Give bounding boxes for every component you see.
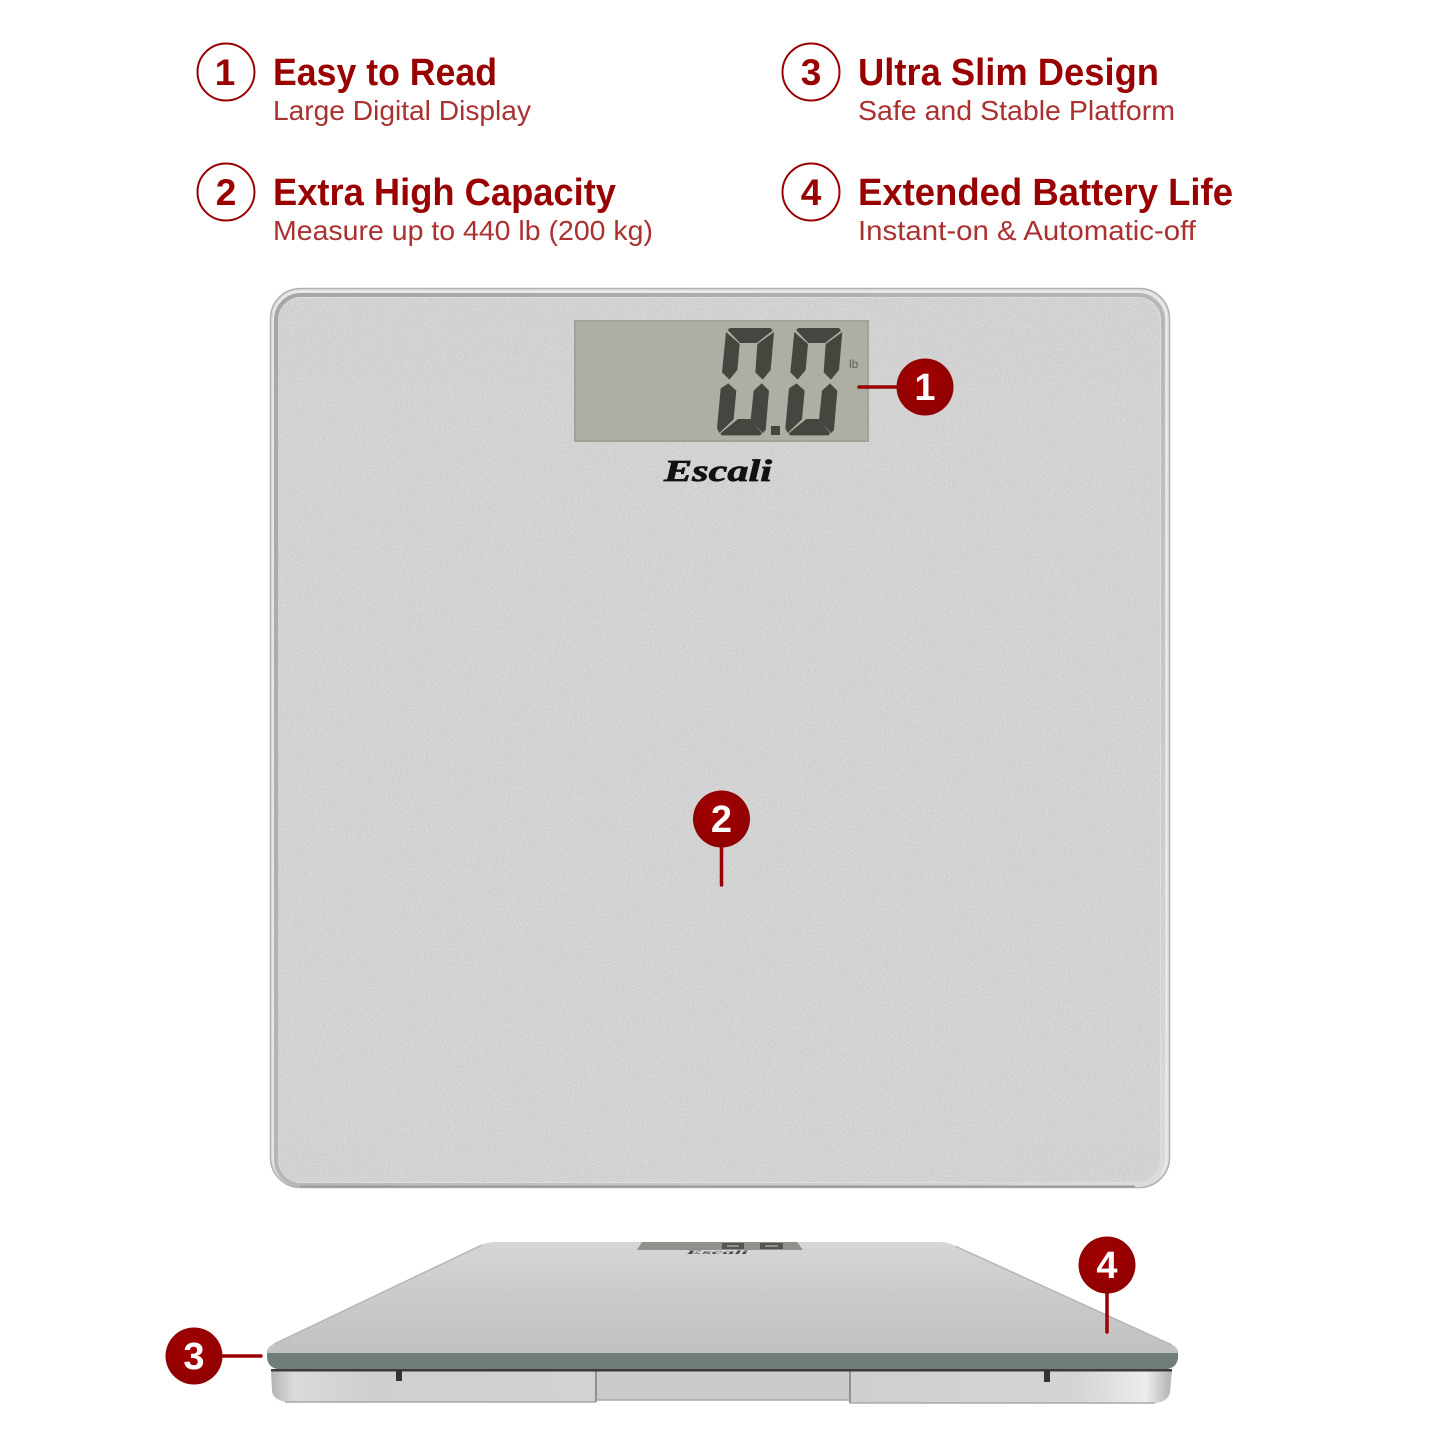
- feature 1: easy to read: Large Digital Display: [273, 95, 531, 126]
- scale side view: [267, 1242, 1178, 1403]
- lcd display: [574, 320, 869, 442]
- lcd digits reading 0.0: [717, 328, 842, 435]
- glass platform green edge: [267, 1353, 1178, 1369]
- feature 3: ultra slim design: Ultra Slim Design: [858, 52, 1159, 94]
- feature 1: easy to read: [198, 44, 531, 126]
- feature 3: ultra slim design: [782, 44, 1175, 126]
- callout 3: 3: [183, 1336, 205, 1378]
- glass platform top: [267, 1242, 1178, 1354]
- feature 4: extended battery life: [782, 164, 1233, 246]
- feature 2: extra high capacity: Extra High Capacity: [273, 172, 616, 214]
- feature 3: ultra slim design: 3: [801, 52, 821, 93]
- small display: Escali: [681, 1251, 751, 1256]
- small display: [637, 1242, 803, 1256]
- callout 4: [1078, 1236, 1136, 1332]
- callout 2: [693, 790, 750, 885]
- feature 2: extra high capacity: 2: [216, 172, 236, 213]
- unit label: lb: [849, 357, 859, 371]
- feature 1: easy to read: 1: [215, 52, 235, 93]
- callout 3: [166, 1328, 261, 1384]
- feature 4: extended battery life: Instant-on & Automatic-off: [858, 215, 1196, 246]
- feature 2: extra high capacity: Measure up to 440 lb (200 kg): [273, 215, 653, 246]
- feature 4: extended battery life: 4: [801, 172, 822, 213]
- feature 2: extra high capacity: [198, 164, 653, 246]
- base housing: [271, 1369, 1172, 1403]
- escali logo: Escali: [663, 453, 773, 488]
- scale top view: [270, 288, 1170, 1188]
- feature 4: extended battery life: Extended Battery Life: [858, 172, 1233, 214]
- callout 2: 2: [711, 799, 732, 841]
- callout 1: [859, 358, 954, 416]
- feature 3: ultra slim design: Safe and Stable Platform: [858, 95, 1175, 126]
- callout 4: 4: [1096, 1245, 1118, 1287]
- feature 1: easy to read: Easy to Read: [273, 52, 497, 94]
- callout 1: 1: [914, 367, 936, 409]
